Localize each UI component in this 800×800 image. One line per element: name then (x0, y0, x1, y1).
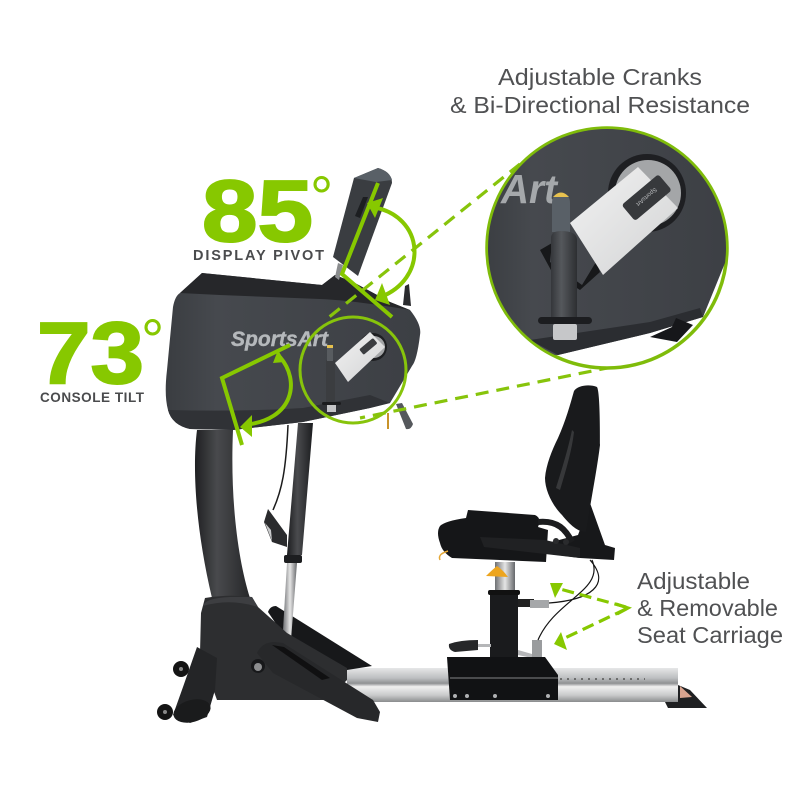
stat: 73 degrees: ° (141, 308, 164, 373)
angle marker: display pivot (342, 183, 414, 317)
label: display pivot: DISPLAY PIVOT (193, 248, 324, 264)
machine: rear pedal (268, 606, 372, 670)
machine: support post and tension bracket (264, 423, 313, 640)
machine: seat carriage base (447, 657, 558, 700)
label: console tilt: CONSOLE TILT (40, 390, 145, 405)
callout heading: seat carriage: Seat Carriage (637, 622, 783, 648)
arrows: seat carriage (550, 583, 628, 650)
crank handle (538, 192, 592, 340)
crank arm (570, 167, 678, 275)
machine: seat (438, 385, 615, 562)
stat: 85 degrees: ° (310, 165, 333, 230)
stat: 85 degrees: 85 (202, 163, 313, 260)
zoom logo fragment: Art (500, 166, 559, 212)
infographic canvas (40, 68, 782, 723)
crank disc (608, 154, 686, 232)
callout heading: cranks and resistance (450, 64, 750, 118)
callout heading: cranks and resistance: Adjustable Cranks (498, 64, 702, 90)
machine: curved upright (195, 430, 250, 598)
zoom connector lines (328, 164, 612, 418)
machine: seat pedestal (449, 560, 599, 670)
zoomed detail: adjustable cranks: SportsArt (634, 186, 658, 207)
console logo: SportsArt (231, 328, 329, 351)
highlight circle around crank (300, 317, 406, 423)
machine: base rail (347, 668, 707, 708)
callout heading: seat carriage: Adjustable (637, 568, 750, 594)
callout heading: cranks and resistance: & Bi-Directional Resistance (450, 92, 750, 118)
machine: small crank (322, 332, 387, 412)
machine: base shroud, wheels and foot (157, 596, 347, 727)
machine: console rear handle and crank lever (387, 284, 413, 429)
angle marker: console tilt (222, 345, 291, 445)
machine: console (166, 273, 420, 430)
machine: front pedal (257, 642, 380, 722)
stat: 73 degrees: 73 (37, 305, 144, 402)
callout heading: seat carriage (637, 568, 783, 648)
callout heading: seat carriage: & Removable (637, 595, 778, 621)
machine: display (333, 168, 392, 280)
zoomed detail: adjustable cranks (480, 120, 740, 368)
